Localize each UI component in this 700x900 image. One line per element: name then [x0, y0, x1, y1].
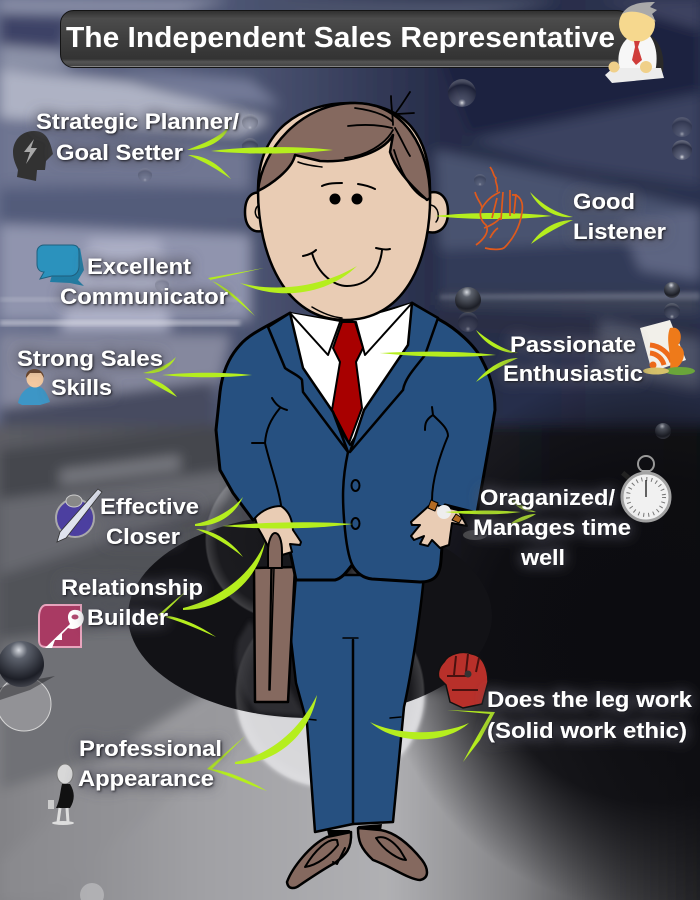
label: relationship builder: [61, 575, 203, 630]
label: organized: Oraganized/: [480, 485, 615, 510]
label: organized: well: [520, 545, 565, 570]
left hand: [255, 506, 301, 568]
label: strategic planner: Goal Setter: [56, 140, 183, 165]
icon: stopwatch: [621, 456, 670, 521]
label: passionate enthusiastic: Passionate: [510, 332, 636, 357]
label: organized: Manages time: [473, 515, 631, 540]
label: organized: [473, 485, 631, 570]
label: strategic planner: Strategic Planner/: [36, 109, 239, 134]
label: leg work: Does the leg work: [487, 687, 693, 712]
swooshes: organized: [445, 497, 536, 524]
glass bubble: lower: [128, 514, 492, 788]
icon: woman figure: [48, 764, 74, 825]
icon: orange hand: [475, 167, 522, 249]
tie: [332, 322, 363, 443]
icon: access key: [39, 605, 84, 648]
label: effective closer: Closer: [106, 524, 180, 549]
swooshes: leg work: [370, 710, 495, 762]
shirt: [290, 303, 412, 445]
icon: businessman at keyboard: [605, 2, 664, 83]
character: salesman: [216, 92, 495, 888]
label: good listener: Listener: [573, 219, 666, 244]
swooshes: good listener: [435, 192, 573, 244]
icon: red fist: [438, 652, 488, 708]
icon: ink and pen: [56, 489, 102, 542]
trousers: [291, 575, 424, 832]
label: strong sales skills: Strong Sales: [17, 346, 163, 371]
glass bubble: upper: [205, 460, 365, 620]
icon: speech bubbles: [37, 245, 84, 286]
label: excellent communicator: Communicator: [60, 284, 228, 309]
label: good listener: Good: [573, 189, 635, 214]
right hand with watch: [411, 500, 467, 548]
sphere: bottom: [80, 883, 104, 900]
facial features: [298, 162, 390, 318]
swooshes: strong sales: [143, 357, 252, 397]
label: passionate enthusiastic: [503, 332, 643, 386]
lapels: [268, 303, 438, 452]
label: professional appearance: Appearance: [78, 766, 214, 791]
light streaks: [0, 292, 700, 325]
hair: [258, 92, 430, 200]
swooshes: professional appearance: [207, 695, 317, 791]
ears: [245, 192, 448, 232]
icon: head with lightning: [13, 131, 53, 181]
swooshes: relationship builder: [158, 542, 265, 637]
icon: person at laptop: [18, 369, 50, 405]
swooshes: effective closer: [195, 497, 353, 557]
label: effective closer: [100, 494, 199, 549]
jacket: [216, 303, 495, 582]
title: The Independent Sales Representative: [66, 22, 615, 54]
label: excellent communicator: [60, 254, 228, 309]
sphere: left: [0, 641, 55, 731]
label: excellent communicator: Excellent: [87, 254, 192, 279]
label: strong sales skills: [17, 346, 163, 400]
label: strong sales skills: Skills: [51, 375, 112, 400]
swooshes: passionate: [380, 330, 518, 382]
reflection: hand: [463, 530, 487, 540]
label: strategic planner: [36, 109, 239, 165]
briefcase: [254, 567, 295, 702]
swooshes: excellent communicator: [208, 266, 357, 316]
label: leg work: (Solid work ethic): [487, 718, 687, 743]
label: relationship builder: Relationship: [61, 575, 203, 600]
label: passionate enthusiastic: Enthusiastic: [503, 361, 643, 386]
label: leg work: [487, 687, 693, 743]
title bar: [60, 10, 630, 68]
label: relationship builder: Builder: [87, 605, 168, 630]
label: good listener: [573, 189, 666, 244]
face: [258, 103, 430, 320]
icon: RSS reader: [640, 320, 695, 375]
label: professional appearance: Professional: [79, 736, 222, 761]
glass spheres: [138, 79, 692, 439]
socks and shoes: [287, 824, 427, 888]
swooshes: strategic planner: [187, 125, 333, 179]
label: professional appearance: [78, 736, 222, 791]
label: effective closer: Effective: [100, 494, 199, 519]
